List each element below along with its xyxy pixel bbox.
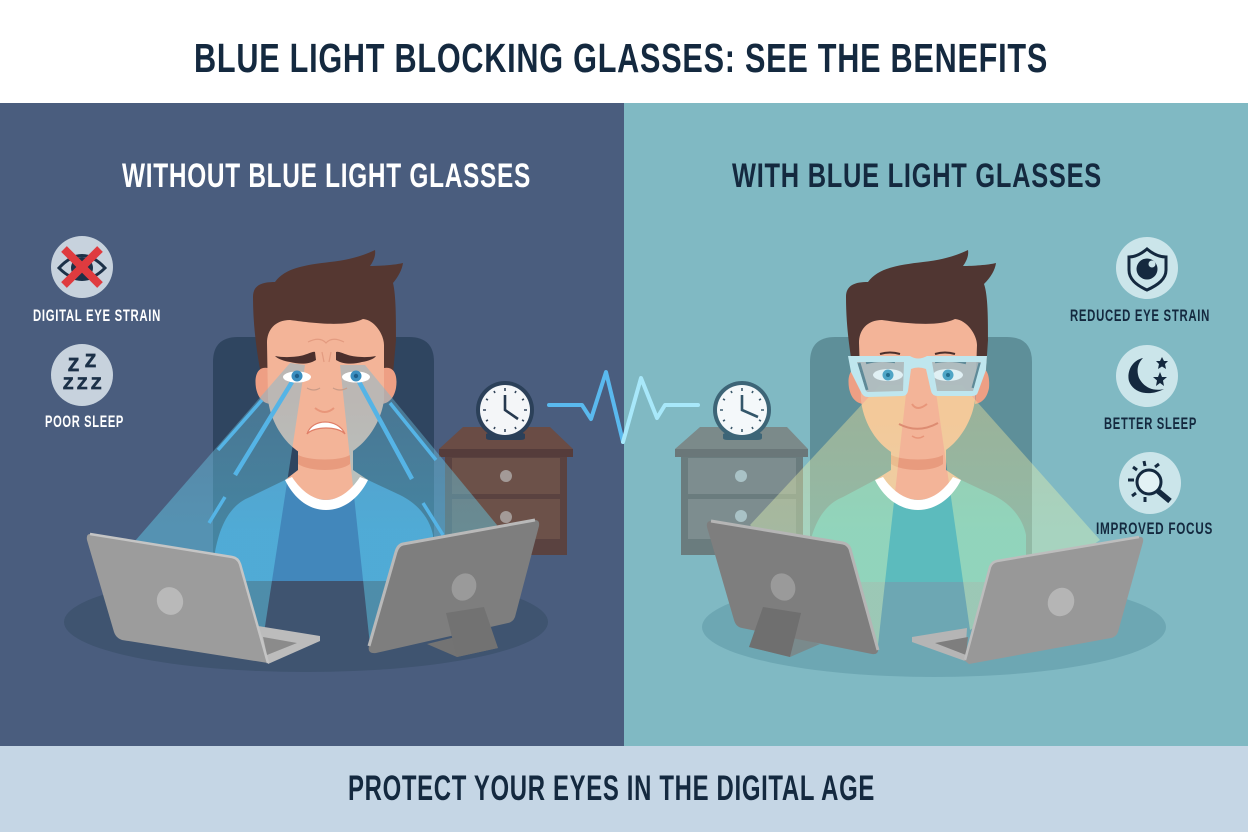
footer band with tagline — [0, 746, 1248, 832]
label: better sleep: BETTER SLEEP — [1104, 415, 1197, 433]
clock — [476, 381, 534, 440]
glasses — [848, 356, 987, 397]
icon: poor sleep: Z — [77, 374, 88, 393]
icon: poor sleep: Z — [63, 374, 74, 393]
icon: poor sleep: Z — [68, 355, 80, 375]
header band with title — [0, 0, 1248, 103]
label: poor sleep: POOR SLEEP — [45, 413, 124, 431]
laptop: left panel — [87, 534, 320, 664]
face features: strained — [275, 352, 376, 434]
neck shadow — [891, 455, 943, 470]
icon: poor sleep: Z — [91, 374, 102, 393]
icon: improved focus — [1119, 452, 1181, 514]
desk shadow — [702, 577, 1166, 677]
shirt — [215, 480, 433, 581]
person: relaxed, with glasses — [808, 250, 1026, 582]
label: digital eye strain: DIGITAL EYE STRAIN — [33, 307, 161, 325]
chair — [810, 337, 1032, 582]
icon: poor sleep: Z — [85, 351, 97, 371]
heading: with glasses: WITH BLUE LIGHT GLASSES — [732, 157, 1102, 195]
monitor: right panel — [707, 521, 878, 657]
icon: better sleep — [1116, 345, 1178, 407]
blue light beams — [135, 363, 497, 645]
shirt — [808, 480, 1026, 582]
face — [267, 319, 384, 460]
panel: without blue light glasses — [0, 103, 624, 746]
heartbeat line linking panels — [549, 372, 698, 442]
neck — [891, 440, 946, 500]
person: strained, no glasses — [215, 250, 433, 581]
monitor: left panel — [369, 520, 539, 657]
hair — [253, 250, 403, 385]
desk shadow — [64, 572, 548, 672]
icon: poor sleep — [51, 344, 113, 406]
collar — [875, 477, 961, 510]
icon: digital eye strain — [51, 236, 113, 298]
neck opening — [285, 470, 368, 500]
collar — [285, 477, 368, 510]
heading: without glasses: WITHOUT BLUE LIGHT GLASSES — [122, 157, 531, 195]
laptop: right panel — [912, 537, 1143, 664]
icon: reduced eye strain — [1116, 237, 1178, 299]
neck shadow — [298, 455, 350, 470]
nightstand — [439, 427, 573, 555]
ears — [848, 368, 989, 404]
face features: relaxed with glasses — [848, 352, 987, 438]
tagline: PROTECT YOUR EYES IN THE DIGITAL AGE — [348, 769, 875, 808]
wrinkles — [308, 339, 344, 362]
panel: with blue light glasses — [624, 103, 1248, 746]
clock — [713, 381, 771, 440]
ears — [256, 368, 396, 404]
chair — [213, 337, 434, 581]
filtered warm light beams — [750, 385, 1100, 645]
neck opening — [875, 470, 961, 500]
hair — [846, 250, 996, 385]
neck — [298, 440, 353, 500]
nightstand — [675, 427, 808, 555]
face — [859, 319, 977, 460]
